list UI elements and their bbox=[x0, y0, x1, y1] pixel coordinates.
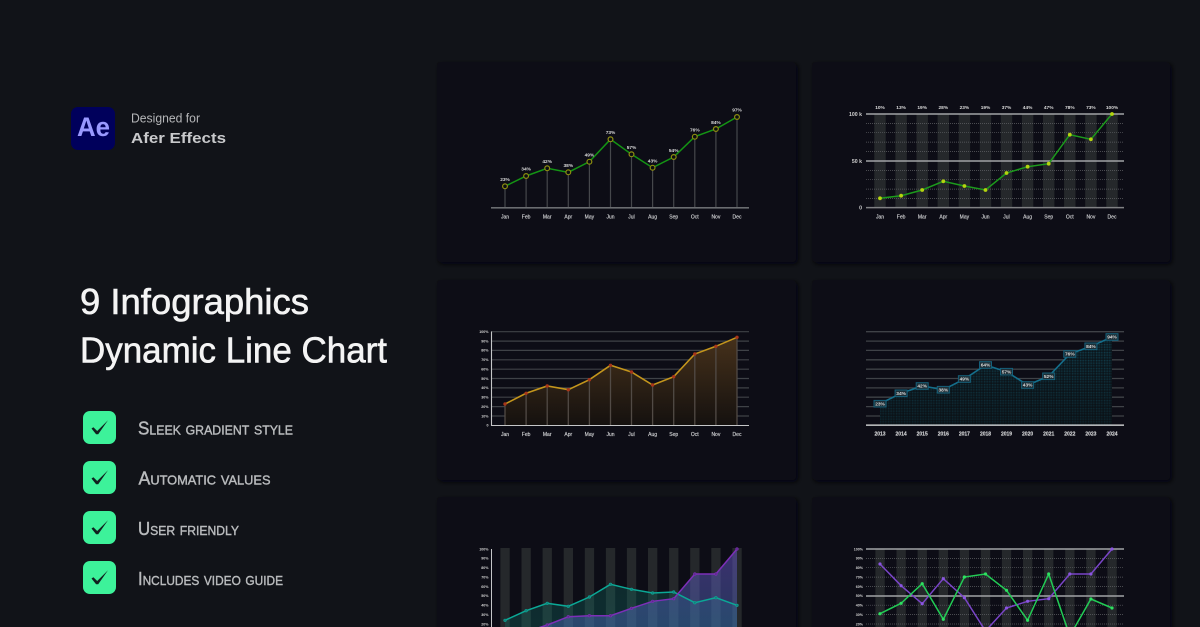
panel: teal and purple overlapping area chart: 80% bbox=[481, 566, 489, 570]
purple line bbox=[505, 549, 737, 627]
panel: orange gradient area chart: 100% bbox=[479, 330, 489, 334]
panel: green line chart with circle markers: Aug bbox=[648, 214, 657, 220]
panel: purple and green crossing line chart: 90% bbox=[856, 557, 864, 561]
panel: teal dotted area chart by year: 64% bbox=[981, 363, 991, 369]
panel: orange gradient area chart: 80% bbox=[481, 349, 489, 353]
panel: line chart with striped bands and 100 k scale: Jul bbox=[1003, 214, 1010, 220]
panel: green line chart with circle markers: Apr bbox=[564, 214, 573, 220]
panel: line chart with striped bands and 100 k scale: Oct bbox=[1066, 214, 1074, 220]
panel: teal dotted area chart by year: 49% bbox=[960, 377, 970, 383]
panel: purple and green crossing line chart: 100% bbox=[854, 547, 864, 551]
panel: teal and purple overlapping area chart: 50% bbox=[481, 594, 489, 598]
panel: green line chart with circle markers: Nov bbox=[711, 214, 721, 220]
panel: teal and purple overlapping area chart: 60% bbox=[481, 585, 489, 589]
panel: purple and green crossing line chart: 70% bbox=[856, 575, 864, 579]
feature: automatic values bbox=[83, 461, 271, 494]
panel: orange gradient area chart: Jul bbox=[628, 432, 635, 438]
panel: orange gradient area chart: Dec bbox=[733, 432, 742, 438]
panel: teal and purple overlapping area chart: 100% bbox=[479, 547, 489, 551]
panel: teal dotted area chart by year: 84% bbox=[1086, 344, 1096, 350]
panel: teal dotted area chart by year: 2016 bbox=[938, 432, 949, 438]
panel: orange gradient area chart: Feb bbox=[522, 432, 531, 438]
panel: orange gradient area chart: 50% bbox=[481, 377, 489, 381]
panel: orange gradient area chart: 20% bbox=[481, 405, 489, 409]
panel: line chart with striped bands and 100 k scale: Mar bbox=[918, 214, 927, 220]
panel: orange gradient area chart: Oct bbox=[691, 432, 699, 438]
panel: line chart with striped bands and 100 k scale: 0 bbox=[859, 206, 862, 212]
feature: sleek gradient style bbox=[83, 411, 293, 444]
line series bbox=[505, 117, 737, 186]
panel: purple and green crossing line chart: 30% bbox=[856, 613, 864, 617]
panel: green line chart with circle markers: 49% bbox=[585, 152, 595, 158]
panel: teal dotted area chart by year: 2020 bbox=[1022, 432, 1033, 438]
panel: teal dotted area chart by year bbox=[812, 280, 1170, 480]
panel: line chart with striped bands and 100 k scale: 47% bbox=[1044, 105, 1054, 111]
panel: green line chart with circle markers: Jun bbox=[606, 214, 615, 220]
panel: purple and green crossing line chart bbox=[812, 497, 1170, 627]
panel: purple and green crossing line chart: 60% bbox=[856, 585, 864, 589]
title: Dynamic Line Chart bbox=[80, 330, 387, 370]
panel: line chart with striped bands and 100 k scale: Sep bbox=[1044, 214, 1053, 220]
panel: green line chart with circle markers: 23% bbox=[500, 177, 511, 183]
panel: line chart with striped bands and 100 k scale: Apr bbox=[939, 214, 948, 220]
panel: green line chart with circle markers: 54% bbox=[669, 148, 679, 154]
panel: green line chart with circle markers: 57% bbox=[627, 145, 637, 151]
panel: line chart with striped bands and 100 k scale: 28% bbox=[938, 105, 949, 111]
purple area bbox=[505, 549, 737, 627]
panel: teal dotted area chart by year: 2023 bbox=[1085, 432, 1097, 438]
panel: teal and purple overlapping area chart: 30% bbox=[481, 613, 489, 617]
panel: orange gradient area chart: Aug bbox=[648, 432, 657, 438]
label: designed for: Afer Effects bbox=[131, 130, 226, 147]
panel: line chart with striped bands and 100 k scale: 13% bbox=[896, 105, 907, 111]
panel: green line chart with circle markers: Feb bbox=[522, 214, 531, 220]
panel: green line chart with circle markers: 43% bbox=[648, 158, 658, 164]
panel: line chart with striped bands and 100 k scale: Feb bbox=[897, 214, 906, 220]
panel: line chart with striped bands and 100 k scale: Aug bbox=[1023, 214, 1032, 220]
panel: line chart with striped bands and 100 k scale: 78% bbox=[1065, 105, 1075, 111]
feature list bbox=[83, 411, 293, 594]
panel: teal dotted area chart by year: 76% bbox=[1065, 352, 1075, 358]
panel: green line chart with circle markers bbox=[437, 62, 796, 262]
panel: orange gradient area chart: May bbox=[585, 432, 595, 438]
panel: teal dotted area chart by year: 38% bbox=[938, 387, 949, 393]
panel: teal dotted area chart by year: 43% bbox=[1023, 383, 1033, 389]
feature: user friendly: User friendly bbox=[138, 519, 239, 539]
panel: line chart with striped bands and 100 k scale: Nov bbox=[1086, 214, 1096, 220]
teal line bbox=[505, 584, 737, 620]
panel: green line chart with circle markers: 34% bbox=[521, 167, 532, 173]
panel: line chart with striped bands and 100 k scale: 50 k bbox=[852, 159, 862, 165]
teal area bbox=[505, 584, 737, 627]
feature: sleek gradient style: Sleek gradient style bbox=[138, 419, 293, 439]
panel: purple and green crossing line chart: 80% bbox=[856, 566, 864, 570]
panel: teal dotted area chart by year: 2022 bbox=[1064, 432, 1076, 438]
panel: line chart with striped bands and 100 k scale: Dec bbox=[1108, 214, 1117, 220]
area fill bbox=[880, 337, 1112, 425]
panel: teal and purple overlapping area chart: 90% bbox=[481, 557, 489, 561]
panel: orange gradient area chart: Mar bbox=[543, 432, 552, 438]
panel: green line chart with circle markers: 97% bbox=[732, 108, 743, 114]
panel: teal dotted area chart by year: 94% bbox=[1107, 335, 1118, 341]
panel: green line chart with circle markers: 73% bbox=[606, 130, 616, 136]
panel: orange gradient area chart: 40% bbox=[481, 386, 489, 390]
panel: teal and purple overlapping area chart: 70% bbox=[481, 575, 489, 579]
panel: teal dotted area chart by year: 2017 bbox=[959, 432, 970, 438]
panel: green line chart with circle markers: 42% bbox=[542, 159, 553, 165]
feature: user friendly bbox=[83, 511, 239, 544]
panel: teal and purple overlapping area chart bbox=[437, 497, 796, 627]
panel: teal dotted area chart by year: 42% bbox=[917, 384, 928, 390]
panel: orange gradient area chart: 90% bbox=[481, 339, 489, 343]
purple line bbox=[880, 549, 1112, 627]
panel: teal dotted area chart by year: 2021 bbox=[1043, 432, 1054, 438]
green line bbox=[880, 574, 1112, 627]
logo: After Effects bbox=[71, 107, 115, 150]
panel: green line chart with circle markers: 76% bbox=[690, 128, 700, 134]
line series bbox=[880, 114, 1112, 198]
panel: orange gradient area chart: 60% bbox=[481, 368, 489, 372]
panel: orange gradient area chart: 70% bbox=[481, 358, 489, 362]
panel: teal dotted area chart by year: 2015 bbox=[917, 432, 928, 438]
panel: line chart with striped bands and 100 k scale: 100% bbox=[1106, 105, 1119, 111]
panel: purple and green crossing line chart: 40% bbox=[856, 604, 864, 608]
title: 9 Infographics bbox=[80, 281, 309, 322]
panel: line chart with striped bands and 100 k scale: 44% bbox=[1023, 105, 1033, 111]
panel: green line chart with circle markers: Oct bbox=[691, 214, 699, 220]
line series bbox=[880, 337, 1112, 404]
panel: line chart with striped bands and 100 k scale: Jan bbox=[876, 214, 884, 220]
panel: teal dotted area chart by year: 57% bbox=[1002, 369, 1012, 375]
logo: After Effects: Ae bbox=[77, 112, 110, 142]
panel: teal and purple overlapping area chart: 40% bbox=[481, 604, 489, 608]
panel: teal and purple overlapping area chart: 20% bbox=[481, 622, 489, 626]
panel: green line chart with circle markers: 84% bbox=[711, 120, 721, 126]
panel: green line chart with circle markers: 38% bbox=[563, 163, 574, 169]
panel: orange gradient area chart: Nov bbox=[711, 432, 721, 438]
panel: teal dotted area chart by year: 23% bbox=[875, 401, 886, 407]
panel: line chart with striped bands and 100 k scale: 19% bbox=[981, 105, 991, 111]
feature: includes video guide bbox=[83, 561, 283, 594]
panel: line chart with striped bands and 100 k scale: 19% bbox=[917, 105, 928, 111]
panel: orange gradient area chart: Jun bbox=[606, 432, 615, 438]
panel: green line chart with circle markers: Sep bbox=[669, 214, 678, 220]
panel: teal dotted area chart by year: 2013 bbox=[874, 432, 886, 438]
panel: green line chart with circle markers: Jul bbox=[628, 214, 635, 220]
panel: teal dotted area chart by year: 2024 bbox=[1106, 432, 1118, 438]
panel: orange gradient area chart: Apr bbox=[564, 432, 573, 438]
panel: line chart with striped bands and 100 k scale: Jun bbox=[981, 214, 990, 220]
panel: orange gradient area chart: 30% bbox=[481, 396, 489, 400]
panel: purple and green crossing line chart: 20% bbox=[856, 622, 864, 626]
panel: orange gradient area chart: 10% bbox=[481, 414, 489, 418]
title bbox=[80, 281, 387, 370]
panel: orange gradient area chart: 0 bbox=[486, 424, 488, 428]
area fill bbox=[505, 337, 737, 425]
line series bbox=[505, 337, 737, 404]
panel: green line chart with circle markers: May bbox=[585, 214, 595, 220]
panel: orange gradient area chart bbox=[437, 280, 796, 480]
panel: line chart with striped bands and 100 k scale bbox=[812, 62, 1170, 262]
panel: line chart with striped bands and 100 k scale: May bbox=[960, 214, 970, 220]
panel: purple and green crossing line chart: 50% bbox=[856, 594, 864, 598]
panel: green line chart with circle markers: Jan bbox=[501, 214, 509, 220]
panel: line chart with striped bands and 100 k scale: 23% bbox=[960, 105, 970, 111]
panel: green line chart with circle markers: Dec bbox=[733, 214, 742, 220]
panel: teal dotted area chart by year: 2019 bbox=[1001, 432, 1012, 438]
panel: teal dotted area chart by year: 2018 bbox=[980, 432, 991, 438]
panel: line chart with striped bands and 100 k scale: 100 k bbox=[849, 112, 862, 118]
panel: teal dotted area chart by year: 2014 bbox=[896, 432, 907, 438]
feature: includes video guide: Includes video guide bbox=[138, 569, 283, 589]
panel: green line chart with circle markers: Mar bbox=[543, 214, 552, 220]
panel: line chart with striped bands and 100 k scale: 10% bbox=[875, 105, 886, 111]
label: designed for: Designed for bbox=[131, 112, 200, 126]
panel: teal dotted area chart by year: 34% bbox=[896, 391, 907, 397]
panel: orange gradient area chart: Sep bbox=[669, 432, 678, 438]
panel: line chart with striped bands and 100 k scale: 73% bbox=[1086, 105, 1096, 111]
panel: teal dotted area chart by year: 52% bbox=[1044, 374, 1054, 380]
label: designed for bbox=[131, 112, 226, 147]
panel: orange gradient area chart: Jan bbox=[501, 432, 509, 438]
feature: automatic values: Automatic values bbox=[138, 468, 271, 488]
panel: line chart with striped bands and 100 k scale: 37% bbox=[1002, 105, 1012, 111]
